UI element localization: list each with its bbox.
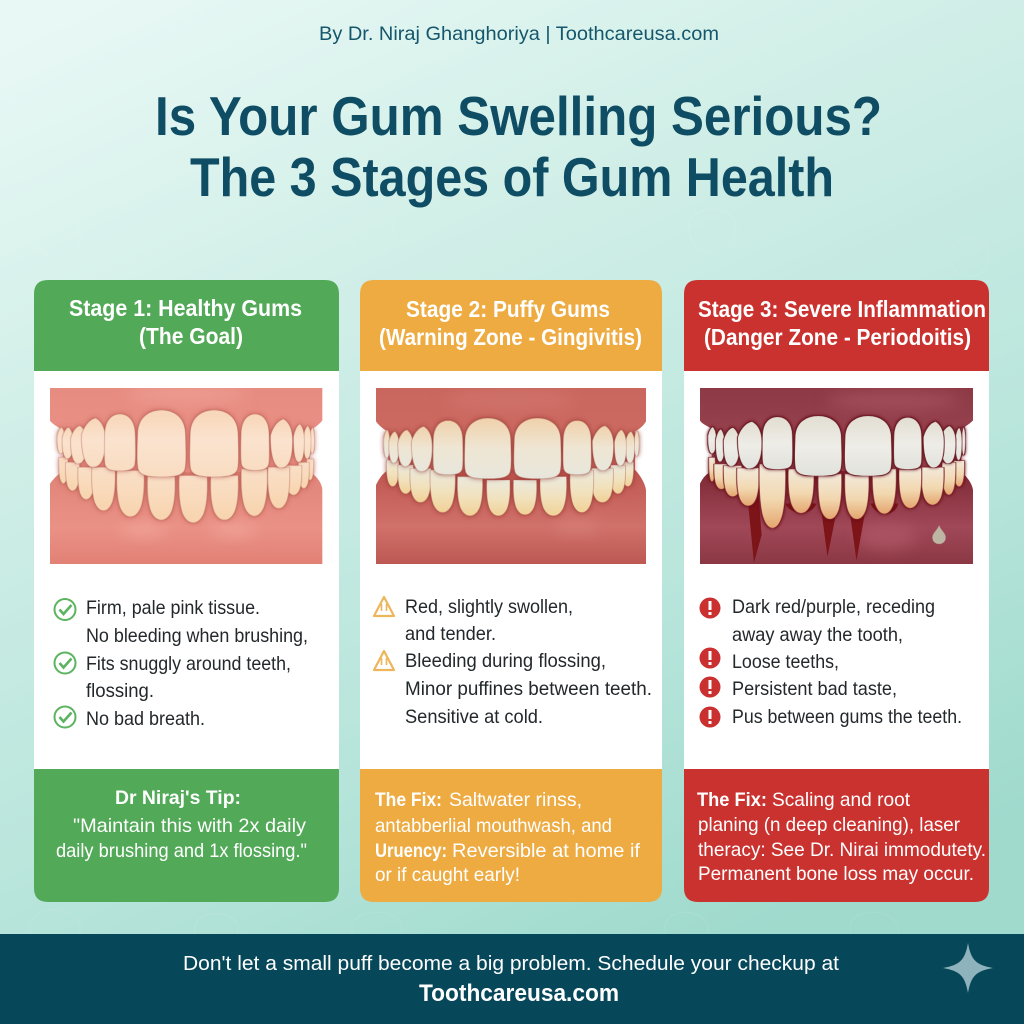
list text [732, 597, 962, 728]
icon: sparkle [943, 943, 993, 993]
stage 1 header: Stage 1: Healthy Gums [69, 295, 302, 321]
list text: Loose teeths, [732, 652, 839, 673]
list text: Sensitive at cold. [405, 707, 543, 728]
illustration: severe inflammation teeth [700, 388, 973, 564]
callout: the fix [684, 769, 989, 902]
callout: the fix: The Fix: [375, 790, 442, 811]
list text: flossing. [86, 681, 154, 702]
title: The 3 Stages of Gum Health [190, 146, 834, 208]
icon: check [54, 706, 76, 728]
list text: Bleeding during flossing, [405, 651, 606, 672]
stage 3 header [684, 280, 989, 371]
callout: the fix: Saltwater rinss, [449, 790, 582, 811]
illustration: puffy gums teeth [376, 388, 646, 564]
list text: Dark red/purple, receding [732, 597, 935, 618]
card body [360, 360, 662, 780]
icon: alert [700, 598, 720, 618]
list text: Pus between gums the teeth. [732, 707, 962, 728]
watermark tooth icons [30, 209, 989, 950]
list text: Minor puffines between teeth. [405, 679, 652, 700]
list text: Persistent bad taste, [732, 679, 897, 700]
pus drop [932, 525, 946, 544]
title [155, 85, 882, 208]
list text: Firm, pale pink tissue. [86, 598, 260, 619]
callout: Dr Niraj's tip: "Maintain this with 2x daily [73, 816, 306, 837]
stage 1 header: (The Goal) [139, 323, 243, 349]
footer band [0, 934, 1024, 1024]
list text [405, 597, 652, 728]
card body [684, 360, 989, 780]
callout: the fix: antabberlial mouthwash, and [375, 816, 612, 837]
icon: alert [700, 676, 720, 698]
stage 2 header: (Warning Zone - Gingivitis) [379, 324, 642, 350]
list text: No bad breath. [86, 709, 205, 730]
byline: By Dr. Niraj Ghanghoriya | Toothcareusa.com [319, 23, 719, 45]
gum pockets [748, 492, 898, 563]
stage 1 header [34, 280, 339, 371]
callout: the fix [360, 769, 662, 902]
icon: warning [374, 597, 394, 616]
symptom list [54, 598, 308, 730]
list text [86, 598, 308, 730]
callout: the fix: planing (n deep cleaning), laser [698, 815, 961, 836]
card body [34, 360, 339, 780]
panel: stage 3 severe inflammation [684, 280, 989, 902]
list text: away away the tooth, [732, 625, 903, 646]
icon: check [54, 652, 76, 674]
list text: Fits snuggly around teeth, [86, 654, 291, 675]
stage 3 header: (Danger Zone - Periodoitis) [704, 324, 971, 350]
callout: the fix: The Fix: [697, 790, 767, 811]
symptom list [700, 597, 962, 728]
icon: check [54, 599, 76, 620]
stage 2 header [360, 280, 662, 371]
footer band: Don't let a small puff become a big problem. Schedule your checkup at [183, 952, 839, 975]
list text: Red, slightly swollen, [405, 597, 573, 618]
panel: stage 2 puffy gums [360, 280, 662, 902]
footer band: Toothcareusa.com [419, 980, 619, 1007]
stage 2 header: Stage 2: Puffy Gums [406, 296, 610, 322]
icon: warning [374, 651, 394, 670]
panel: stage 1 healthy gums [34, 280, 339, 902]
callout: the fix: Permanent bone loss may occur. [698, 864, 974, 885]
symptom list [374, 597, 652, 728]
icon: alert [700, 648, 720, 668]
stage 3 header: Stage 3: Severe Inflammation [698, 296, 986, 322]
callout: Dr Niraj's tip: Dr Niraj's Tip: [115, 788, 241, 809]
illustration: healthy teeth [50, 388, 322, 564]
title: Is Your Gum Swelling Serious? [155, 85, 882, 147]
callout: the fix: Scaling and root [772, 790, 911, 811]
callout: the fix: Reversible at home if [452, 841, 641, 862]
callout: the fix: theracy: See Dr. Nirai immodutety. [698, 840, 986, 861]
list text: No bleeding when brushing, [86, 626, 308, 647]
callout: the fix: or if caught early! [375, 865, 520, 886]
callout: the fix: Uruency: [375, 841, 447, 862]
icon: alert [700, 706, 720, 728]
callout: Dr Niraj's tip: daily brushing and 1x flossing." [56, 841, 307, 862]
list text: and tender. [405, 624, 496, 645]
callout: Dr Niraj's tip [34, 769, 339, 902]
